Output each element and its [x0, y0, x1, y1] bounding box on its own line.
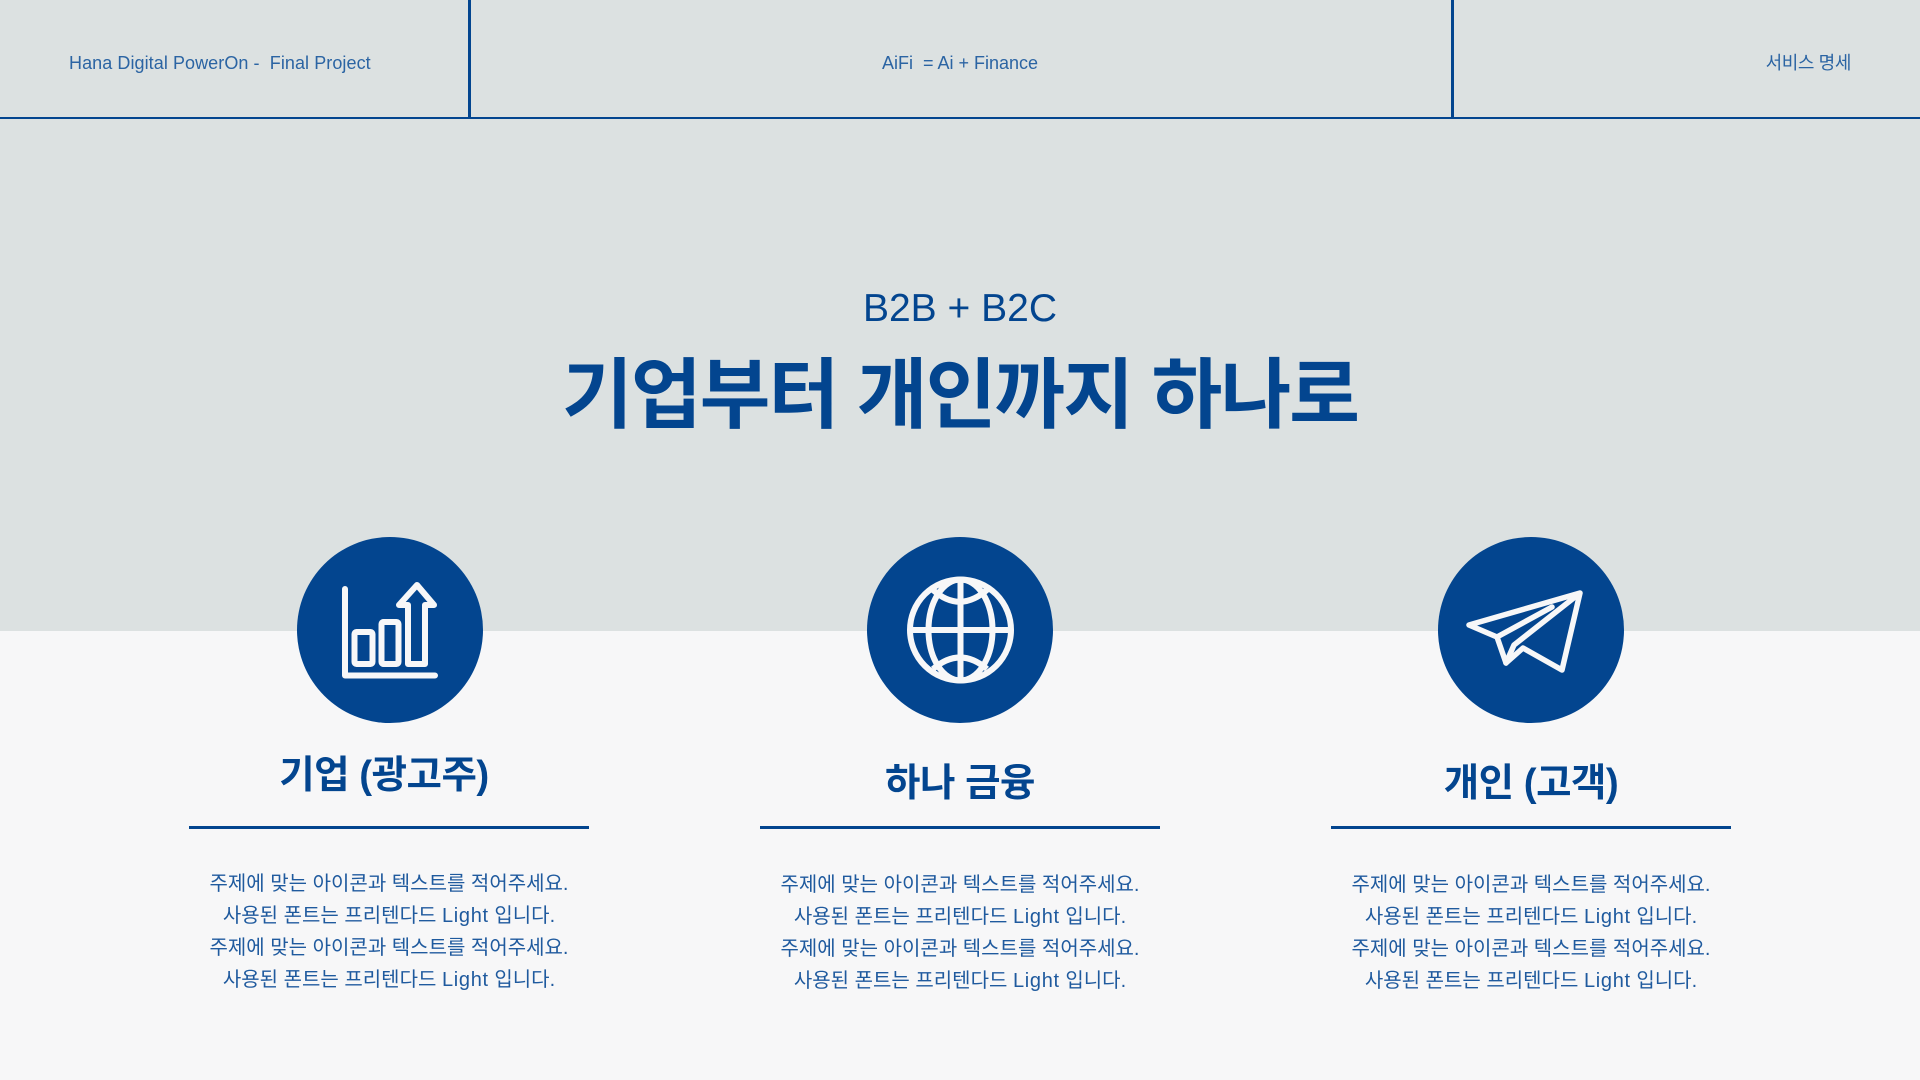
divider: customer	[1331, 826, 1731, 829]
text: customer: 사용된 폰트는 프리텐다드 Light 입니다.	[1365, 970, 1697, 992]
text: advertiser	[210, 873, 568, 991]
header: divider left	[468, 0, 470, 118]
header: divider right	[1451, 0, 1454, 118]
text: Hana finance: 사용된 폰트는 프리텐다드 Light 입니다.	[794, 970, 1126, 992]
text: advertiser: 주제에 맞는 아이콘과 텍스트를 적어주세요.	[210, 937, 568, 959]
icon: paper plane	[1438, 537, 1624, 723]
text: Hana finance: 주제에 맞는 아이콘과 텍스트를 적어주세요.	[780, 874, 1139, 896]
text: advertiser: 사용된 폰트는 프리텐다드 Light 입니다.	[223, 969, 555, 991]
top background band	[0, 0, 1920, 631]
text: customer: 주제에 맞는 아이콘과 텍스트를 적어주세요.	[1352, 874, 1710, 896]
text: advertiser: 사용된 폰트는 프리텐다드 Light 입니다.	[223, 905, 555, 927]
divider: Hana finance	[760, 826, 1160, 829]
icon: growth chart	[297, 537, 483, 723]
text: advertiser: 주제에 맞는 아이콘과 텍스트를 적어주세요.	[210, 873, 568, 895]
icon: globe	[867, 537, 1053, 723]
text: Hana finance	[780, 874, 1139, 992]
header bar	[0, 0, 1920, 118]
text: customer: 사용된 폰트는 프리텐다드 Light 입니다.	[1365, 906, 1697, 928]
header: concept: AiFi = Ai + Finance	[882, 53, 1038, 73]
heading: advertiser: 기업 (광고주)	[279, 754, 489, 797]
header: project name: Hana Digital PowerOn - Final Project	[69, 53, 371, 73]
subtitle: B2B + B2C	[863, 287, 1057, 330]
text: Hana finance: 사용된 폰트는 프리텐다드 Light 입니다.	[794, 906, 1126, 928]
divider: advertiser	[189, 826, 589, 829]
text: customer: 주제에 맞는 아이콘과 텍스트를 적어주세요.	[1352, 938, 1710, 960]
heading: customer: 개인 (고객)	[1444, 762, 1618, 805]
heading: Hana finance: 하나 금융	[885, 762, 1035, 805]
title: 기업부터 개인까지 하나로	[562, 353, 1358, 439]
text: Hana finance: 주제에 맞는 아이콘과 텍스트를 적어주세요.	[780, 938, 1139, 960]
text: customer	[1352, 874, 1710, 992]
header: section name: 서비스 명세	[1766, 53, 1851, 73]
